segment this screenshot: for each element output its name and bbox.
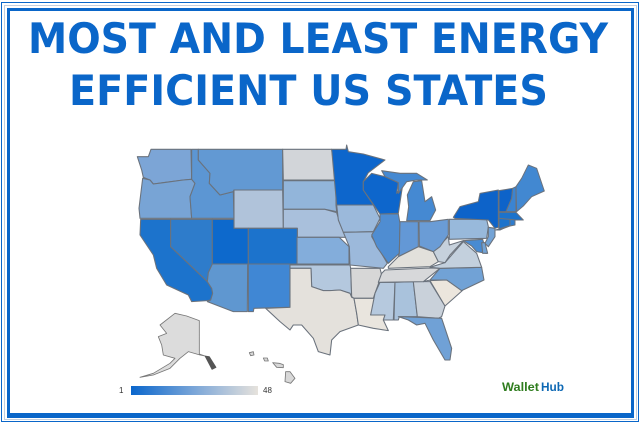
WalletHub logo: Wallet [502, 382, 539, 394]
legend maximum label: 48 [263, 386, 272, 395]
inset: Alaska [140, 313, 216, 377]
legend colour ramp [131, 386, 258, 395]
northeast states [453, 165, 544, 230]
title [28, 14, 609, 115]
western states [137, 149, 347, 312]
plains, south and midwest [266, 145, 495, 360]
WalletHub logo [502, 382, 564, 394]
map of US states [137, 145, 544, 383]
inset: Hawaii [249, 352, 295, 383]
title: EFFICIENT US STATES [69, 66, 548, 115]
legend [119, 386, 272, 395]
legend minimum label: 1 [119, 386, 124, 395]
WalletHub logo: Hub [541, 382, 564, 394]
title: MOST AND LEAST ENERGY [28, 14, 609, 63]
